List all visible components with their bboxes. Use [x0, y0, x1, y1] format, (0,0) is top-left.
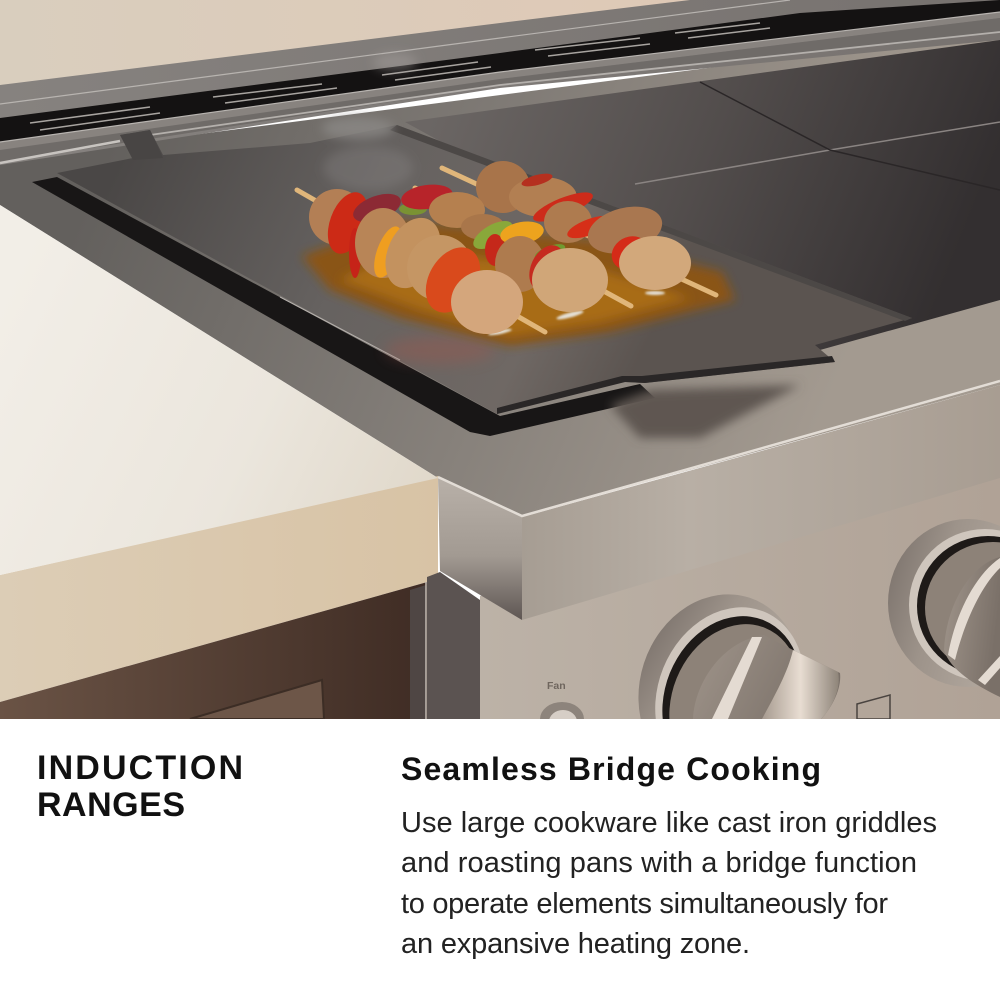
range side post: [410, 572, 480, 719]
body text: and roasting pans with a bridge function: [401, 847, 917, 879]
heading: induction ranges: [37, 749, 243, 824]
knob: right: [888, 519, 1000, 697]
fan button: [540, 682, 584, 719]
photo: induction range griddle with skewers: [0, 0, 1000, 719]
knob: centre: [638, 594, 840, 719]
stainless cooktop surface: [0, 30, 1000, 516]
countertop surface: [0, 205, 438, 575]
body text: an expansive heating zone.: [401, 928, 750, 960]
lower control panel: [480, 476, 1000, 719]
steam: [322, 53, 417, 190]
cabinet below counter: [0, 579, 438, 719]
oil pool: [302, 220, 735, 346]
griddle reflection: [385, 336, 495, 364]
steel vent strip: [0, 0, 1000, 165]
subheading: Seamless Bridge Cooking: [401, 751, 821, 787]
griddle plate: [57, 125, 912, 414]
heading: induction ranges: INDUCTION: [37, 749, 243, 787]
skewer sticks: [297, 168, 716, 332]
griddle handle shadow: [610, 385, 800, 438]
dark glass cooktop: [405, 40, 1000, 350]
fan button: Fan: [547, 680, 566, 692]
control symbol: [857, 695, 890, 719]
wall backsplash: [0, 0, 700, 86]
range front lip: [438, 381, 1000, 620]
skewer: front: [309, 187, 523, 334]
body text: Use large cookware like cast iron griddles: [401, 807, 937, 839]
skewer: back: [476, 161, 691, 290]
skewer: middle: [399, 181, 608, 312]
heading: induction ranges: RANGES: [37, 786, 185, 824]
body text: [401, 807, 937, 960]
countertop front edge: [0, 476, 438, 702]
body text: to operate elements simultaneously for: [401, 888, 888, 920]
griddle recess: [32, 177, 655, 436]
